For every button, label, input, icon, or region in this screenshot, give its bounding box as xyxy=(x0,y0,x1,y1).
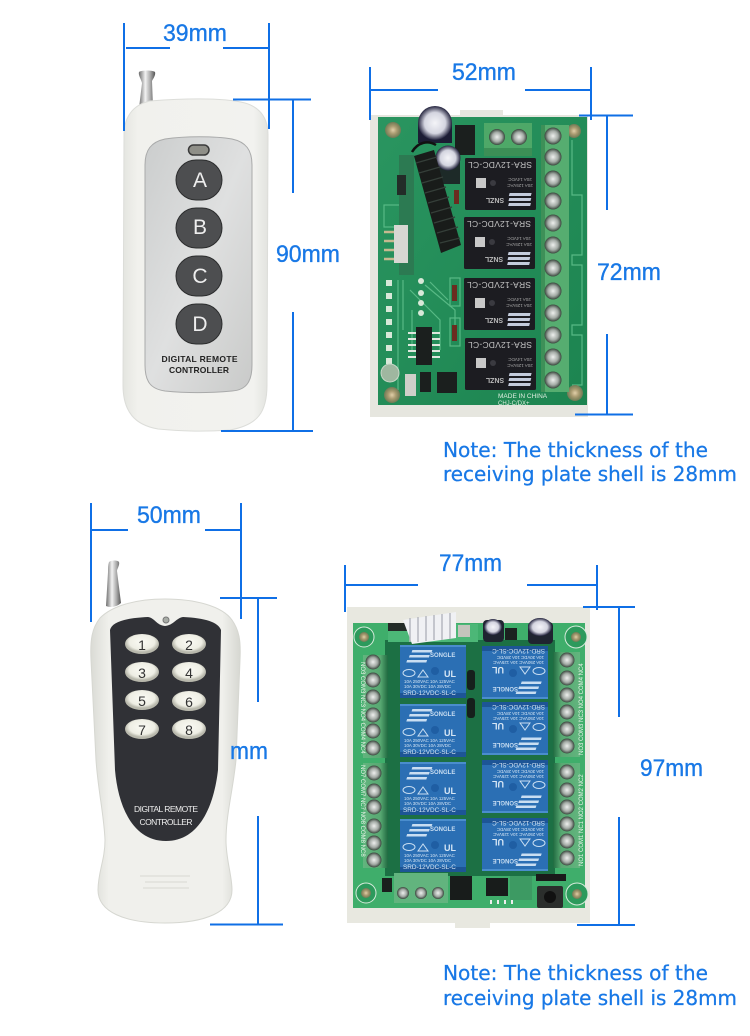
number buttons: 2 xyxy=(185,637,193,653)
number buttons: 5 xyxy=(138,693,146,709)
PCB xyxy=(353,623,585,908)
mounting posts xyxy=(384,122,583,403)
receiver coil xyxy=(412,142,461,253)
black face panel xyxy=(110,617,221,841)
dimension: 39mm width: 39mm xyxy=(163,20,227,47)
left relays xyxy=(400,645,466,872)
number buttons xyxy=(125,634,206,739)
remote label: DIGITAL REMOTE xyxy=(162,354,238,364)
right terminals xyxy=(553,652,580,868)
remote label xyxy=(134,804,198,827)
icon: antenna xyxy=(106,560,121,607)
dimension: 39mm width xyxy=(124,20,269,131)
number buttons: 4 xyxy=(185,665,193,681)
dimension: partly hidden height: mm xyxy=(230,738,268,765)
silkscreen: MADE IN CHINA xyxy=(498,393,548,400)
terminal labels: NO3 COM3 NC3 NO4 COM4 NC4 xyxy=(579,663,585,755)
number buttons: 1 xyxy=(138,637,146,653)
chips and button xyxy=(450,874,566,908)
capacitors xyxy=(418,106,460,184)
note: lower shell thickness xyxy=(443,961,737,1010)
dimension: 97mm height: 97mm xyxy=(640,755,703,782)
number buttons: 3 xyxy=(138,665,146,681)
button D xyxy=(176,304,222,344)
button A: A xyxy=(193,169,207,192)
dimension: 50mm width xyxy=(91,502,241,622)
remote label: DIGITAL REMOTE xyxy=(134,804,198,814)
note: lower shell thickness: receiving plate shell is 28mm xyxy=(443,986,737,1010)
panel: 4-relay receiver board xyxy=(370,106,588,417)
battery cover ridges xyxy=(140,876,190,888)
dimension: 52mm width: 52mm xyxy=(452,59,516,86)
12-way terminal strip xyxy=(541,125,569,392)
note: upper shell thickness xyxy=(443,438,737,486)
PCB xyxy=(378,117,587,405)
dimension: partly hidden height xyxy=(210,598,283,924)
shell xyxy=(347,607,590,928)
note: upper shell thickness: Note: The thickness of the xyxy=(443,438,708,462)
icon: antenna xyxy=(139,70,155,110)
terminal labels: NO1 COM1 NC1 NO2 COM2 NC2 xyxy=(579,774,585,866)
number buttons: 8 xyxy=(185,722,193,738)
remote label: CONTROLLER xyxy=(140,817,192,827)
top antenna module xyxy=(388,612,478,644)
dimension: 77mm width: 77mm xyxy=(439,550,502,577)
button C xyxy=(176,256,222,296)
dimension: 52mm width xyxy=(370,59,591,120)
note: upper shell thickness: receiving plate shell is 28mm xyxy=(443,462,737,486)
relay column xyxy=(464,158,536,390)
power terminal xyxy=(382,873,448,903)
dimension: 90mm height: 90mm xyxy=(276,241,340,268)
button A xyxy=(176,160,222,200)
grey face panel xyxy=(145,137,252,392)
LED xyxy=(381,364,399,382)
capacitors xyxy=(483,618,553,644)
LED xyxy=(188,145,209,155)
button C: C xyxy=(192,265,208,288)
dimension: 50mm width: 50mm xyxy=(137,502,201,529)
diodes xyxy=(467,670,475,718)
dimension: 72mm height: 72mm xyxy=(597,259,661,286)
right relays xyxy=(482,646,548,871)
dimension: 72mm height xyxy=(575,115,661,414)
remote body xyxy=(91,599,240,923)
remote body xyxy=(123,99,268,431)
pads xyxy=(386,278,424,364)
remote label: CONTROLLER xyxy=(169,365,229,375)
number buttons: 6 xyxy=(185,694,193,710)
dimension: 97mm height xyxy=(577,607,703,925)
button B: B xyxy=(193,216,207,239)
dimension: 77mm width xyxy=(345,550,597,612)
remote label xyxy=(162,354,238,375)
mounting posts xyxy=(354,626,588,905)
dimension: 90mm height xyxy=(221,100,340,431)
panel: four-button remote xyxy=(123,70,268,431)
chips and diodes xyxy=(405,190,459,396)
small regulator xyxy=(455,125,475,155)
shell xyxy=(370,110,588,417)
panel: eight-button remote xyxy=(91,560,240,923)
button B xyxy=(176,208,222,248)
note: lower shell thickness: Note: The thickness of the xyxy=(443,961,708,985)
traces xyxy=(384,140,582,390)
terminal labels: NO3 COM3 NC3 NO4 COM4 NC4 xyxy=(359,662,365,754)
terminal labels xyxy=(359,662,585,866)
button D: D xyxy=(192,313,208,336)
LED xyxy=(163,617,169,623)
terminal labels: NO7 COM7 NC7 NO8 COM8 NC8 xyxy=(359,765,365,857)
left terminals xyxy=(363,654,388,868)
panel: 8-relay receiver board xyxy=(347,607,590,928)
two-way terminal xyxy=(484,123,532,156)
panel: 4-relay receiver board: CHJ-C/DX+ xyxy=(498,401,530,407)
number buttons: 7 xyxy=(138,722,146,738)
RF module xyxy=(384,155,414,275)
